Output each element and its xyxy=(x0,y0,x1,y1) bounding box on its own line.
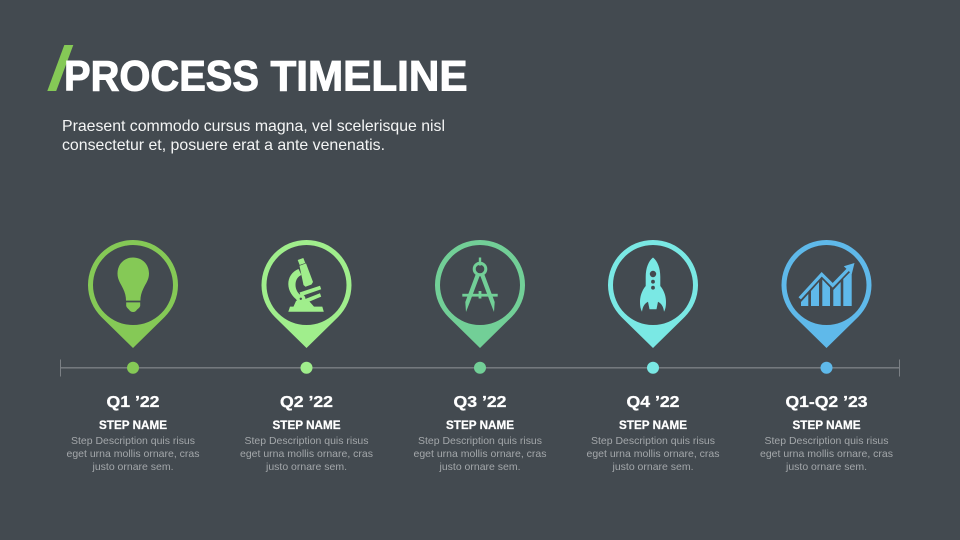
quarter label: Q1 ’22 xyxy=(106,394,160,411)
pin with rocket icon xyxy=(608,240,698,348)
quarter label: Q4 ’22 xyxy=(626,394,680,411)
timeline dot xyxy=(127,362,139,374)
title xyxy=(64,52,468,100)
step description: Step Description quis risus xyxy=(418,435,542,447)
icon: microscope xyxy=(288,258,324,312)
pin with lightbulb icon xyxy=(88,240,178,348)
step 5 xyxy=(760,240,893,473)
step description: Step Description quis risus xyxy=(764,435,888,447)
step description: eget urna mollis ornare, cras xyxy=(66,448,200,460)
pin with growth chart icon xyxy=(782,240,872,348)
step description: Step Description quis risus xyxy=(244,435,368,447)
step description xyxy=(586,435,720,473)
step 3 xyxy=(414,240,546,473)
quarter label: Q2 ’22 xyxy=(280,394,333,411)
step description: Step Description quis risus xyxy=(591,435,715,447)
step 2 xyxy=(240,240,373,473)
step description: Step Description quis risus xyxy=(71,435,195,447)
step description xyxy=(414,435,546,473)
step description xyxy=(66,435,200,473)
step description: eget urna mollis ornare, cras xyxy=(586,448,720,460)
quarter label: Q3 ’22 xyxy=(454,394,506,411)
step description: justo ornare sem. xyxy=(439,461,520,473)
subtitle xyxy=(62,118,445,154)
icon: growth chart xyxy=(800,263,854,306)
step description: justo ornare sem. xyxy=(92,461,174,473)
step description xyxy=(240,435,373,473)
step name: STEP NAME xyxy=(446,418,514,432)
subtitle: consectetur et, posuere erat a ante venenatis. xyxy=(62,137,385,154)
step name: STEP NAME xyxy=(99,418,167,432)
step name: STEP NAME xyxy=(619,418,687,432)
timeline dot xyxy=(300,362,312,374)
timeline axis xyxy=(60,360,900,376)
icon: lightbulb xyxy=(118,258,149,312)
quarter label: Q1-Q2 ’23 xyxy=(786,394,868,411)
pin with microscope icon xyxy=(262,240,352,348)
step description: eget urna mollis ornare, cras xyxy=(760,448,893,460)
icon: drawing compass xyxy=(462,258,498,312)
title accent slash xyxy=(47,45,73,91)
title: PROCESS xyxy=(64,52,259,100)
title: TIMELINE xyxy=(270,52,468,100)
step description: justo ornare sem. xyxy=(612,461,694,473)
step description: justo ornare sem. xyxy=(785,461,867,473)
pin with compass icon xyxy=(435,240,525,348)
step name: STEP NAME xyxy=(272,418,340,432)
step name: STEP NAME xyxy=(792,418,860,432)
subtitle: Praesent commodo cursus magna, vel scelerisque nisl xyxy=(62,118,445,135)
icon: rocket xyxy=(640,258,666,312)
step description: justo ornare sem. xyxy=(265,461,347,473)
timeline dot xyxy=(820,362,832,374)
step description: eget urna mollis ornare, cras xyxy=(414,448,546,460)
step 4 xyxy=(586,240,720,473)
timeline dot xyxy=(474,362,486,374)
timeline dot xyxy=(647,362,659,374)
step description xyxy=(760,435,893,473)
step 1 xyxy=(66,240,200,473)
step description: eget urna mollis ornare, cras xyxy=(240,448,373,460)
